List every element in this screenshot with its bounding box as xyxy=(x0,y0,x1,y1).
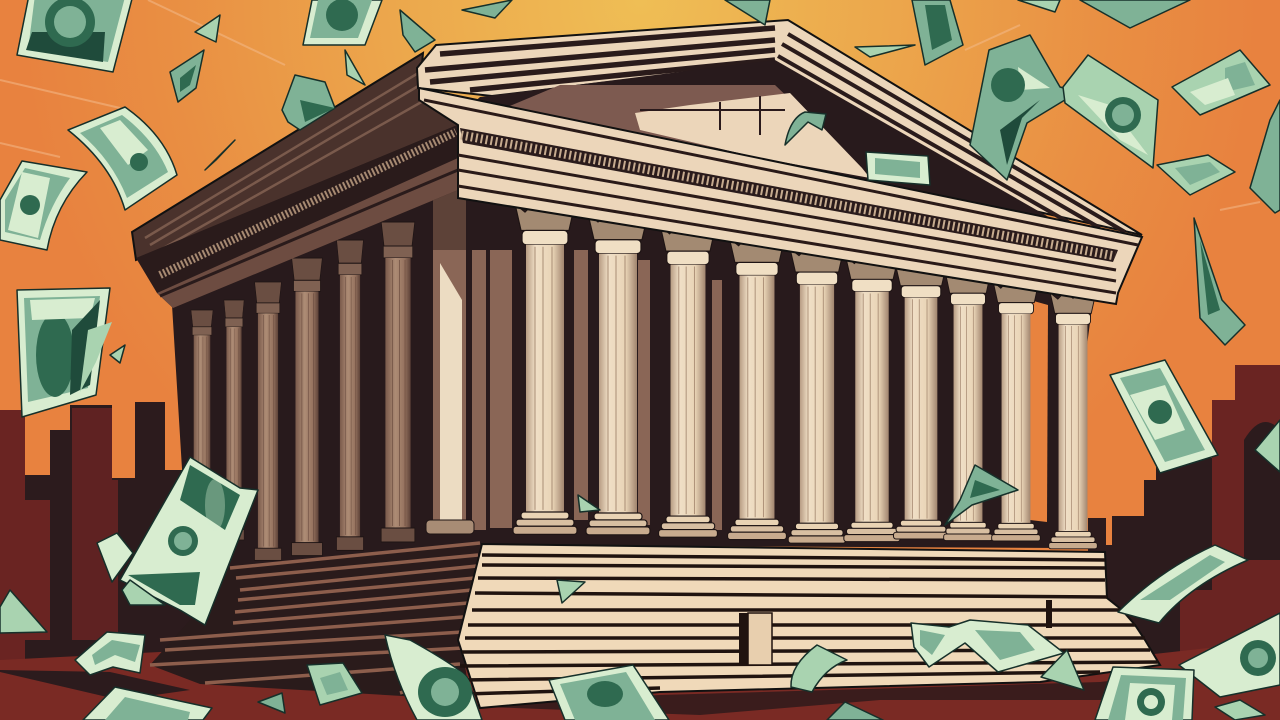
left colonnade xyxy=(191,190,474,560)
ground xyxy=(0,640,1280,720)
sky streaks xyxy=(0,0,1260,210)
entablature front xyxy=(419,88,1142,304)
city skyline left xyxy=(0,402,195,720)
building dark interior xyxy=(172,170,1095,600)
bills on the stairs xyxy=(549,112,1084,720)
back walls xyxy=(472,250,722,530)
front colonnade xyxy=(513,202,1097,549)
left roof slope xyxy=(132,53,460,308)
bills upper right xyxy=(725,0,1280,345)
side stairs xyxy=(150,543,487,700)
bills lower left xyxy=(0,457,482,720)
front stairs xyxy=(458,544,1160,708)
bills upper left xyxy=(0,0,512,417)
city skyline right xyxy=(1088,365,1280,720)
orange gap at right end xyxy=(1030,300,1048,522)
pediment recess xyxy=(460,60,1060,232)
bills lower right xyxy=(1095,360,1280,720)
upper roof plane xyxy=(417,20,1142,235)
